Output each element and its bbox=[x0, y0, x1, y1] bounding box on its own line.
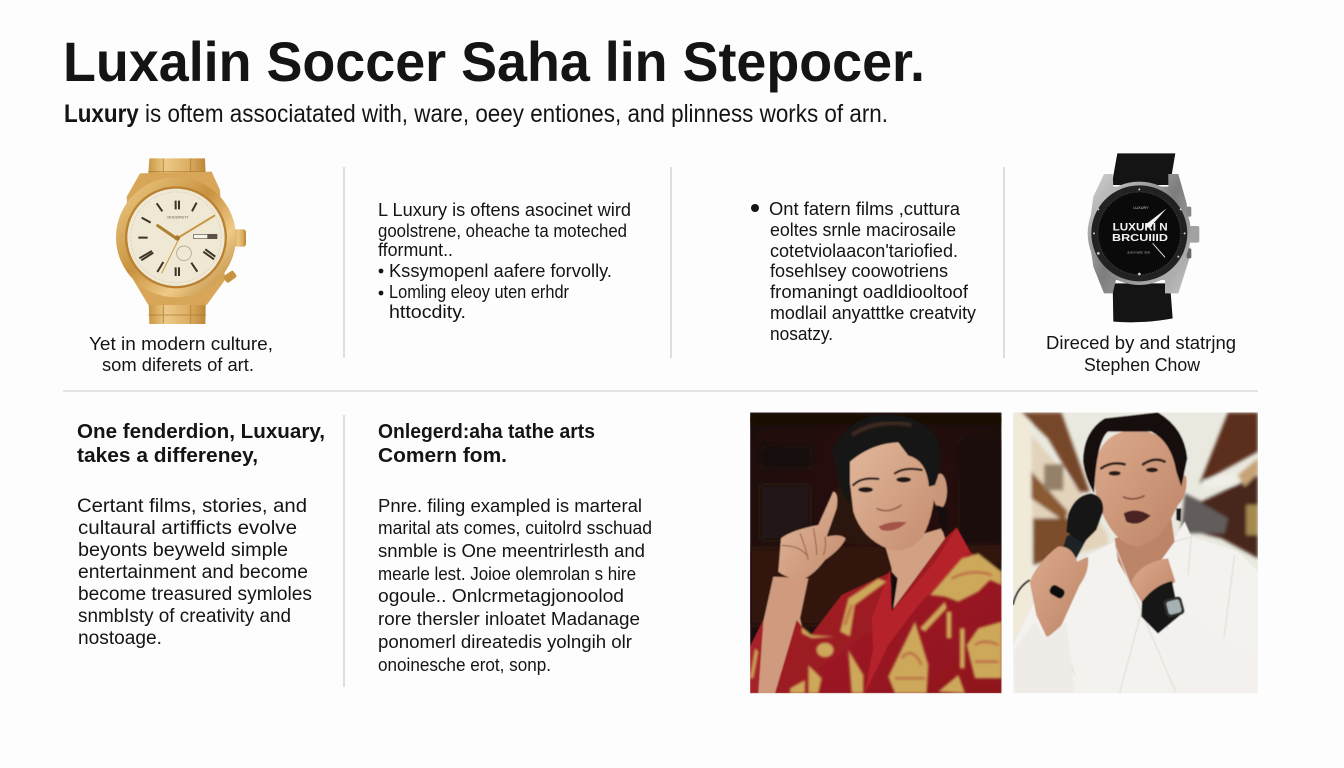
heading: martial arts: Comern fom. bbox=[378, 445, 507, 467]
text block: film example: snmble is One meentrirlesth and bbox=[378, 541, 645, 561]
icon: gold wristwatch bbox=[116, 158, 246, 324]
text block: film example: rore thersler inloatet Madanage bbox=[378, 609, 640, 629]
heading: martial arts: Onlegerd:aha tathe arts bbox=[378, 421, 595, 443]
caption: gold watch bbox=[89, 334, 273, 375]
panel: luxury difference text bbox=[77, 421, 325, 649]
subtitle: Luxury is oftem associatated with, ware, oeey entiones, and plinness works of arn. bbox=[64, 100, 888, 128]
heading: luxury difference bbox=[77, 421, 325, 467]
text block: modern films bullet: nosatzy. bbox=[770, 324, 833, 344]
text block: films and artifacts bbox=[77, 496, 312, 649]
caption: gold watch: som diferets of art. bbox=[102, 355, 254, 375]
text block: luxury list: Kssymopenl aafere forvolly. bbox=[389, 261, 612, 281]
text block: modern films bullet: fosehlsey coowotriens bbox=[770, 261, 948, 281]
heading: luxury difference: takes a differeney, bbox=[77, 445, 258, 467]
heading: luxury difference: One fenderdion, Luxuary, bbox=[77, 421, 325, 443]
text block: films and artifacts: become treasured symloles bbox=[78, 584, 312, 605]
caption: black watch: Direced by and statrjng bbox=[1046, 333, 1236, 353]
text block: modern films bullet bbox=[751, 199, 976, 344]
text block: film example: mearle lest. Joioe olemrolan s hire bbox=[378, 564, 636, 584]
text block: films and artifacts: Certant films, stories, and bbox=[77, 496, 307, 517]
text block: luxury list: httocdity. bbox=[389, 302, 466, 322]
text block: luxury list: fformunt.. bbox=[378, 240, 453, 260]
panel: black watch bbox=[1046, 153, 1236, 375]
icon: black wristwatch: BRCUIIID bbox=[1112, 233, 1168, 244]
text block: luxury list: L Luxury is oftens asocinet wird bbox=[378, 200, 631, 220]
heading: martial arts bbox=[378, 421, 595, 467]
text block: films and artifacts: snmbIsty of creativity and bbox=[78, 606, 291, 627]
text block: film example: marital ats comes, cuitolrd sschuad bbox=[378, 518, 652, 538]
icon: black wristwatch: LUXURY bbox=[1133, 205, 1149, 210]
text block: film example: ponomerl direatedis yolngih olr bbox=[378, 632, 632, 652]
icon: black wristwatch: automatic dial bbox=[1127, 250, 1150, 254]
text block: film example: onoinesche erot, sonp. bbox=[378, 655, 551, 675]
text block: luxury list: Lomling eleoy uten erhdr bbox=[389, 282, 569, 302]
text block: modern films bullet: cotetviolaacon'tariofied. bbox=[770, 241, 958, 261]
text block: film example: ogoule.. Onlcrmetagjonoolod bbox=[378, 586, 624, 606]
text block: films and artifacts: entertainment and become bbox=[78, 562, 308, 583]
text block: films and artifacts: cultaural artifficts evolve bbox=[78, 518, 297, 539]
photo: man in red and gold robe bbox=[750, 412, 1002, 693]
text block: film example bbox=[378, 496, 652, 675]
text block: modern films bullet: Ont fatern films ,cuttura bbox=[769, 199, 961, 219]
photo: man in white with microphone bbox=[1013, 412, 1258, 693]
text block: film example: Pnre. filing exampled is marteral bbox=[378, 496, 642, 516]
title: Luxalin Soccer Saha lin Stepocer. bbox=[63, 30, 925, 93]
icon: black wristwatch: LUXURI N bbox=[1113, 221, 1168, 233]
text block: films and artifacts: nostoage. bbox=[78, 628, 162, 649]
text block: luxury list bbox=[378, 200, 631, 322]
text block: modern films bullet: modlail anyatttke creatvity bbox=[770, 303, 976, 323]
text block: films and artifacts: beyonts beyweld simple bbox=[78, 540, 288, 561]
panel: martial arts text bbox=[378, 421, 652, 675]
text block: luxury list: goolstrene, oheache ta moteched bbox=[378, 221, 627, 241]
text block: modern films bullet: fromaningt oadldiooltoof bbox=[770, 282, 969, 302]
icon: gold wristwatch: MODERNITY bbox=[167, 216, 189, 220]
icon: black wristwatch bbox=[1088, 153, 1199, 322]
caption: black watch: Stephen Chow bbox=[1084, 355, 1201, 375]
panel: gold watch bbox=[89, 158, 273, 375]
caption: gold watch: Yet in modern culture, bbox=[89, 334, 273, 354]
caption: black watch bbox=[1046, 333, 1236, 375]
text block: modern films bullet: eoltes srnle macirosaile bbox=[770, 220, 956, 240]
